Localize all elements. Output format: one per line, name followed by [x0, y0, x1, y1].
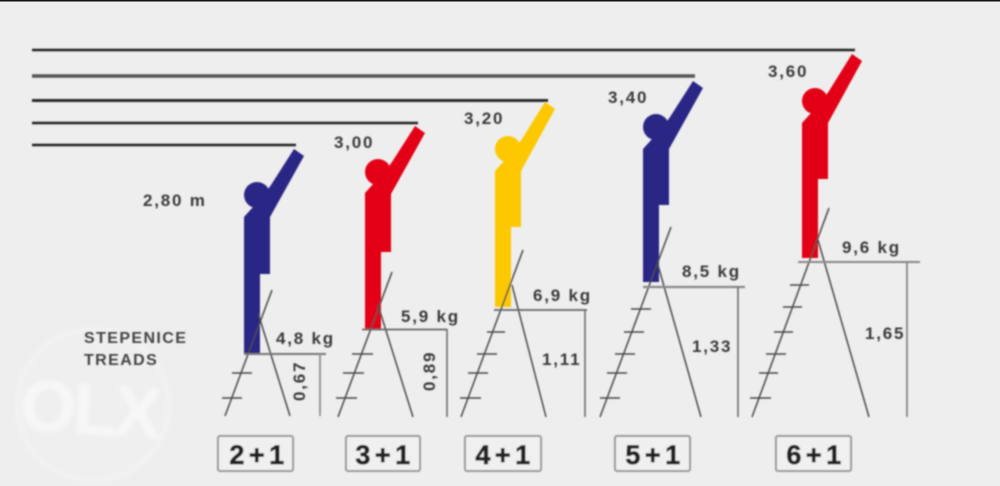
badge: 4+1: 4+1	[475, 440, 535, 470]
badge: 6+1	[776, 436, 851, 471]
weight labels	[276, 238, 901, 348]
figure: red 3,60	[802, 54, 862, 258]
height labels	[143, 62, 808, 210]
badge: 3+1: 3+1	[355, 440, 415, 470]
caption: stepenice treads	[84, 330, 187, 369]
badge: 2+1	[218, 436, 293, 471]
height reference lines	[32, 50, 855, 145]
figure: red 3,00	[365, 126, 425, 329]
caption: stepenice treads: STEPENICE	[84, 330, 187, 347]
figure: navy 2,80 m	[244, 149, 304, 353]
badge: 3+1	[346, 436, 420, 471]
ladder: 5+1	[600, 227, 745, 417]
height labels: 3,60	[768, 62, 808, 81]
badge: 2+1: 2+1	[229, 440, 289, 470]
badge: 6+1: 6+1	[786, 440, 846, 470]
ladder: 2+1	[222, 290, 326, 416]
badge: 5+1: 5+1	[625, 440, 685, 470]
badge: 4+1	[465, 436, 541, 471]
badge: 5+1	[615, 436, 690, 471]
figure: yellow 3,20	[495, 102, 555, 307]
weight labels: 8,5 kg	[682, 262, 741, 281]
weight labels: 9,6 kg	[842, 238, 901, 257]
ladder: 4+1	[460, 250, 587, 417]
ladder height labels	[290, 324, 905, 401]
height labels: 2,80 m	[143, 191, 207, 210]
watermark: OLX logo: OLX	[18, 365, 165, 455]
ladder height labels: 1,11	[542, 350, 581, 369]
figure: navy 3,40	[643, 81, 703, 282]
watermark: OLX logo	[17, 329, 169, 481]
weight labels: 4,8 kg	[276, 329, 335, 348]
caption: stepenice treads: TREADS	[84, 352, 158, 369]
weight labels: 6,9 kg	[533, 286, 592, 305]
ladder height labels: 0,89	[420, 351, 439, 391]
ladder height labels: 0,67	[290, 361, 309, 401]
ladder: 6+1	[750, 208, 920, 417]
height labels: 3,00	[334, 133, 374, 152]
height labels: 3,20	[464, 109, 504, 128]
ladder: 3+1	[336, 272, 447, 417]
ladder height labels: 1,65	[865, 324, 905, 343]
height labels: 3,40	[608, 88, 648, 107]
ladder height labels: 1,33	[692, 337, 732, 356]
weight labels: 5,9 kg	[401, 307, 460, 326]
